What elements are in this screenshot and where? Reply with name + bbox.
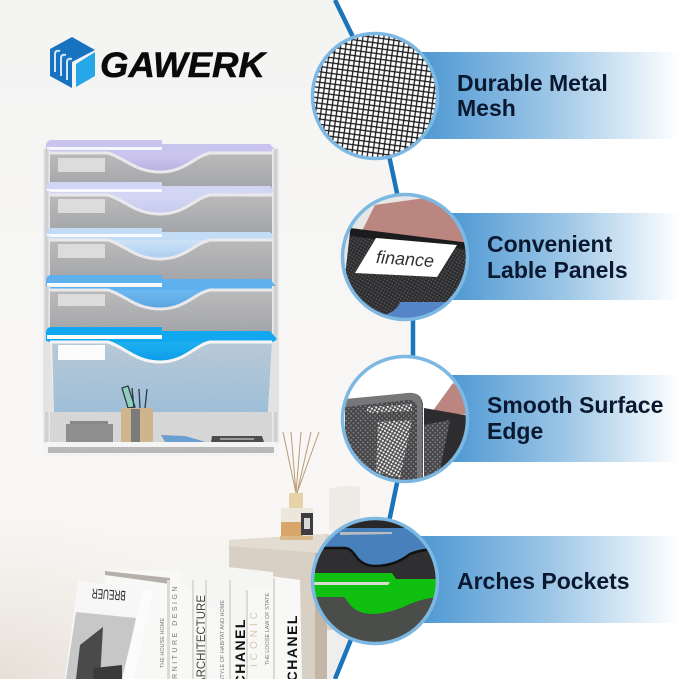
label: Arches Pockets	[457, 568, 630, 594]
pen cup	[121, 386, 153, 442]
label panel photo circle: finance	[375, 247, 435, 271]
label panel photo circle	[340, 190, 470, 325]
label: Edge	[487, 418, 543, 444]
wordmark: GAWERK	[100, 46, 268, 85]
brand logo	[50, 37, 268, 88]
mesh photo circle	[312, 34, 438, 158]
ribbon	[420, 52, 679, 139]
bottom shelf	[43, 386, 279, 455]
front lip	[43, 442, 279, 455]
book pile backing	[100, 570, 302, 679]
label: Smooth Surface	[487, 392, 663, 418]
feature 4: arches pockets	[310, 515, 679, 650]
cabinet	[215, 534, 351, 679]
label: Lable Panels	[487, 257, 628, 283]
label: Durable Metal	[457, 70, 608, 96]
spine shadows	[167, 578, 275, 679]
white right-hand background	[335, 0, 679, 679]
back panel	[44, 146, 278, 456]
wall file organizer	[43, 140, 279, 456]
grey box	[66, 421, 113, 442]
blue stapler	[161, 435, 206, 442]
books	[65, 562, 302, 679]
edge photo circle	[340, 355, 470, 485]
pocket 1: lavender	[43, 140, 279, 195]
pockets photo circle	[310, 515, 440, 650]
pocket 5: bright blue, tall	[43, 327, 279, 412]
feature 1: durable metal mesh	[312, 34, 679, 158]
pocket 4: sky blue	[43, 275, 279, 342]
icon: blue cube	[50, 37, 95, 88]
spine titles: THE HOUSE HOME	[160, 618, 166, 668]
book cover: Breuer: BREUER	[91, 586, 126, 604]
blue connecting curve	[335, 0, 413, 679]
feature 3: smooth surface edge	[340, 355, 679, 485]
book cover: Breuer	[65, 581, 154, 679]
feature 2: label panels	[340, 190, 679, 325]
spine titles: STYLE OF HABITAT AND HOME	[220, 600, 226, 679]
ribbon	[420, 536, 679, 623]
reed diffuser	[280, 432, 319, 540]
pocket 3: light blue	[43, 228, 279, 290]
spine titles: ICONIC	[249, 608, 260, 667]
label: Mesh	[457, 95, 516, 121]
spine titles	[160, 584, 300, 679]
pocket 2: pale periwinkle	[43, 182, 279, 241]
white cup	[329, 486, 360, 532]
spine titles: THE LOOSE LAW OF STATE	[265, 593, 271, 665]
label: Convenient	[487, 231, 613, 257]
black tray	[211, 436, 264, 442]
ribbon	[450, 213, 679, 300]
ribbon	[450, 375, 679, 462]
